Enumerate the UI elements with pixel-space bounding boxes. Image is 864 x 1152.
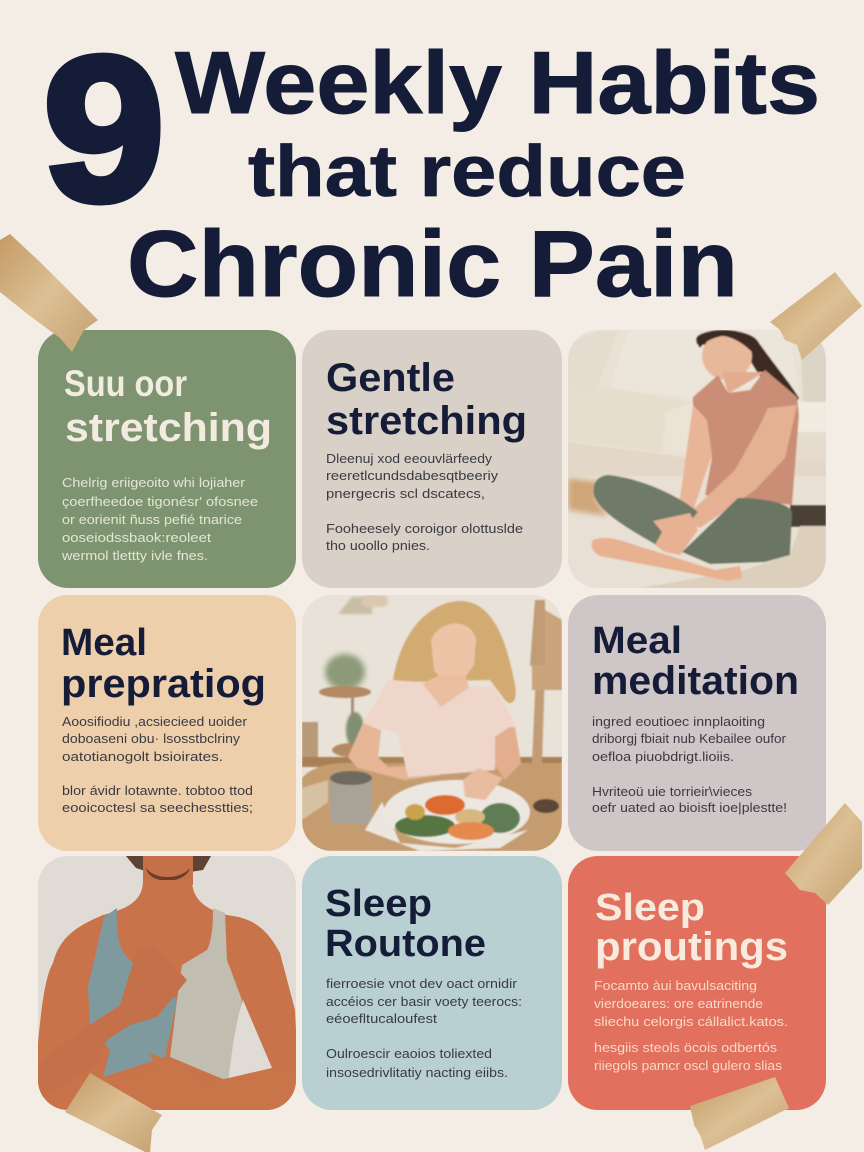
sleep routine body text: Oulroescir eaoios toliexted: [326, 1046, 492, 1061]
gentle stretching body text: pnergecris scl dscatecs,: [326, 486, 485, 501]
meal prep body text: blor ávidr lotawnte. tobtoo ttod: [62, 783, 253, 798]
meal prep heading: [61, 622, 266, 706]
green card body text: [61, 475, 258, 563]
panel: illustration of torso with hand on chest: [38, 856, 300, 1110]
panel: sleep routine card: [302, 856, 562, 1110]
meal prep heading: Meal: [61, 622, 147, 664]
woman: [592, 330, 799, 581]
tape: top right: [770, 272, 862, 360]
sleep routine body text: accéios cer basir voety teerocs:: [326, 994, 522, 1009]
hair and chin: [126, 856, 211, 885]
meal meditation body text: Hvriteoü uie torrieir\vieces: [592, 784, 753, 799]
meal meditation body text: [592, 714, 787, 815]
jar: [330, 771, 372, 824]
sofa: [568, 330, 826, 476]
sleep routine heading: Routone: [325, 923, 486, 965]
sleep routine body text: [326, 976, 522, 1080]
sleep proutings body text: Focamto àui bavulsaciting: [594, 978, 757, 993]
sleep routine heading: Sleep: [325, 883, 432, 925]
panel: sleep proutings card: [568, 856, 826, 1110]
plate of food: [365, 780, 530, 851]
green card heading: [64, 363, 272, 450]
panel: meal prep card: [38, 595, 296, 851]
gentle stretching heading: [326, 356, 527, 443]
upper hand and forearm: [38, 962, 187, 1097]
meal prep heading: prepratiog: [61, 662, 266, 706]
meal meditation heading: meditation: [592, 659, 799, 703]
meal meditation heading: [592, 620, 799, 703]
sleep routine body text: eéoefltucaloufest: [326, 1011, 437, 1026]
meal prep body text: [62, 714, 253, 815]
table: [302, 763, 562, 851]
panel: meal meditation card: [568, 595, 826, 851]
room decor: [302, 595, 562, 767]
meal meditation body text: driborgj fbiait nub Kebailee oufor: [592, 731, 787, 746]
green card body text: wermol tlettty ivle fnes.: [61, 548, 208, 563]
coaster: [533, 799, 559, 813]
panel: green stretching card: [38, 330, 296, 588]
title: that reduce: [248, 132, 686, 212]
body: [38, 880, 300, 1110]
sleep proutings heading: proutings: [595, 925, 788, 969]
green card body text: or eorienit ñuss pefié tnarice: [62, 512, 242, 527]
green card heading: Suu oor: [64, 363, 187, 404]
gentle stretching body text: Fooheesely coroigor olottuslde: [326, 521, 523, 536]
hand on plate: [463, 768, 503, 800]
sleep proutings body text: vierdoeares: ore eatrinende: [594, 996, 763, 1011]
title: Weekly Habits: [175, 33, 820, 132]
meal prep body text: Aoosifiodiu ,acsiecieed uoider: [62, 714, 248, 729]
panel: photo of woman seated on floor: [568, 330, 826, 588]
sleep proutings body text: sliechu celorgis cállalict.katos.: [594, 1014, 788, 1029]
sleep proutings body text: riiegols pamcr oscl gulero slias: [594, 1058, 783, 1073]
sleep routine heading: [325, 883, 486, 965]
panel: photo of woman with meal: [302, 595, 562, 851]
sleep proutings heading: Sleep: [595, 887, 705, 929]
sleep proutings body text: [594, 978, 788, 1073]
gentle stretching body text: reeretlcundsdabesqtbeeriy: [326, 468, 499, 483]
title: 9: [43, 14, 165, 244]
gentle stretching body text: Dleenuj xod eeouvlärfeedy: [326, 451, 493, 466]
meal prep body text: eooicoctesl sa seechesstties;: [62, 800, 253, 815]
green card heading: stretching: [65, 406, 272, 450]
gentle stretching heading: Gentle: [326, 356, 455, 400]
meal prep body text: oatotianogolt bsioirates.: [62, 749, 223, 764]
tape: bottom right: [690, 1077, 789, 1150]
woman: [348, 601, 521, 780]
gentle stretching heading: stretching: [326, 399, 527, 443]
green card body text: Chelrig eriigeoito whi lojiaher: [62, 475, 246, 490]
tape: bottom left: [65, 1073, 162, 1152]
meal meditation body text: ingred eoutioec innplaoiting: [592, 714, 765, 729]
sleep proutings body text: hesgiis steols öcois odbertós: [594, 1040, 778, 1055]
meal meditation heading: Meal: [592, 620, 682, 662]
title: Chronic Pain: [127, 211, 738, 316]
floor and rug: [568, 476, 826, 588]
meal meditation body text: oefr uated ao bioisft ioe|plestte!: [592, 800, 787, 815]
tank top: [88, 908, 242, 1082]
sleep routine body text: insosedrivlitatiy nacting eiibs.: [326, 1065, 508, 1080]
meal prep body text: doboaseni obu· lsosstbclriny: [62, 731, 241, 746]
sleep proutings heading: [595, 887, 788, 969]
tape: top left: [0, 234, 98, 352]
gentle stretching body text: [326, 451, 523, 553]
tape: right side: [785, 803, 862, 905]
panel: gentle stretching card: [302, 330, 562, 588]
title: [43, 14, 820, 316]
gentle stretching body text: tho uoollo pnies.: [326, 538, 430, 553]
sleep routine body text: fierroesie vnot dev oact ornidir: [326, 976, 518, 991]
lower hand: [148, 1053, 296, 1110]
green card body text: ooseiodssbaok:reoleet: [62, 530, 211, 545]
green card body text: çoerfheedoe tigonésr' ofosnee: [62, 494, 258, 509]
meal meditation body text: oefloa piuobdrigt.lioiis.: [592, 749, 734, 764]
background gap by arm: [228, 1000, 272, 1082]
